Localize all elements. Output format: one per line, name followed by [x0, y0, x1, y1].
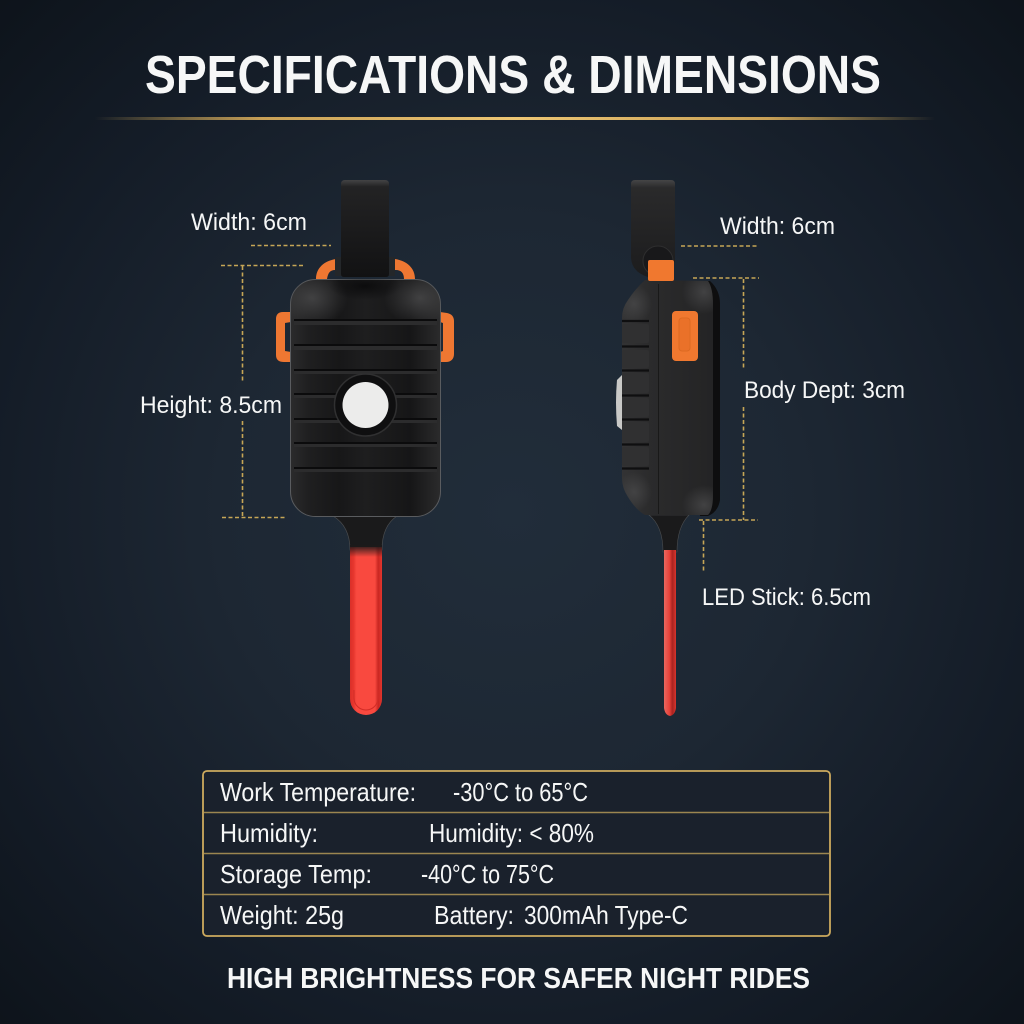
- side: stem: [649, 515, 689, 552]
- front: button: [342, 382, 388, 428]
- side: switch detail: [679, 318, 690, 351]
- row: storage temp: Storage Temp:: [220, 859, 372, 889]
- row: weight and battery: Battery:: [434, 900, 514, 930]
- side: body: [622, 280, 713, 515]
- label: LED stick: LED Stick: 6.5cm: [702, 584, 871, 611]
- side: lens: [616, 375, 622, 430]
- label: side width: Width: 6cm: [720, 213, 835, 240]
- spec table: [203, 771, 830, 936]
- title: SPECIFICATIONS & DIMENSIONS: [145, 45, 881, 105]
- table frame: [203, 771, 830, 936]
- front: body shading: [291, 280, 440, 319]
- front view device: [276, 180, 456, 715]
- front: strap buckle: [335, 257, 395, 276]
- row: storage temp: -40°C to 75°C: [421, 859, 554, 889]
- side: LED stick: [664, 550, 676, 716]
- dimension lines: [221, 246, 759, 572]
- row: work temperature: -30°C to 65°C: [453, 777, 588, 807]
- side: strap: [631, 180, 675, 277]
- side: seam: [658, 284, 659, 514]
- front: stick inner tube: [354, 690, 378, 710]
- row: work temperature: [220, 777, 588, 807]
- row: weight and battery: 300mAh Type-C: [524, 900, 688, 930]
- row: storage temp: [220, 859, 554, 889]
- row: weight and battery: [220, 900, 688, 930]
- side: body shading: [624, 281, 713, 515]
- side view device: [616, 180, 726, 716]
- side: strap pivot: [643, 246, 673, 276]
- label: front width: Width: 6cm: [191, 209, 307, 236]
- side: rear black face: [700, 281, 720, 516]
- footer tagline: HIGH BRIGHTNESS FOR SAFER NIGHT RIDES: [227, 963, 810, 995]
- row: humidity: Humidity:: [220, 818, 318, 848]
- row: humidity: Humidity: < 80%: [429, 818, 594, 848]
- front: side orange loop left: [276, 312, 291, 362]
- front: LED stick: [350, 547, 382, 715]
- front: side orange loop right: [440, 312, 454, 362]
- label: front height: Height: 8.5cm: [140, 392, 282, 419]
- table row dividers: [204, 812, 829, 894]
- front: body: [290, 280, 440, 516]
- front: stick shading: [350, 545, 382, 557]
- row: humidity: [220, 818, 594, 848]
- side: ribs: [622, 324, 649, 466]
- row: work temperature: Work Temperature:: [220, 777, 416, 807]
- label: body depth: Body Dept: 3cm: [744, 377, 905, 404]
- row: weight and battery: Weight: 25g: [220, 900, 344, 930]
- side: top orange tab: [648, 260, 674, 281]
- front: top orange loop: [316, 259, 415, 279]
- front: strap: [341, 180, 389, 277]
- front: stem: [333, 516, 397, 550]
- front: ribs: [294, 319, 437, 469]
- side: orange switch: [672, 311, 698, 361]
- side: rib grooves: [622, 321, 649, 468]
- title underline: [95, 117, 935, 120]
- front: button ring: [334, 374, 396, 436]
